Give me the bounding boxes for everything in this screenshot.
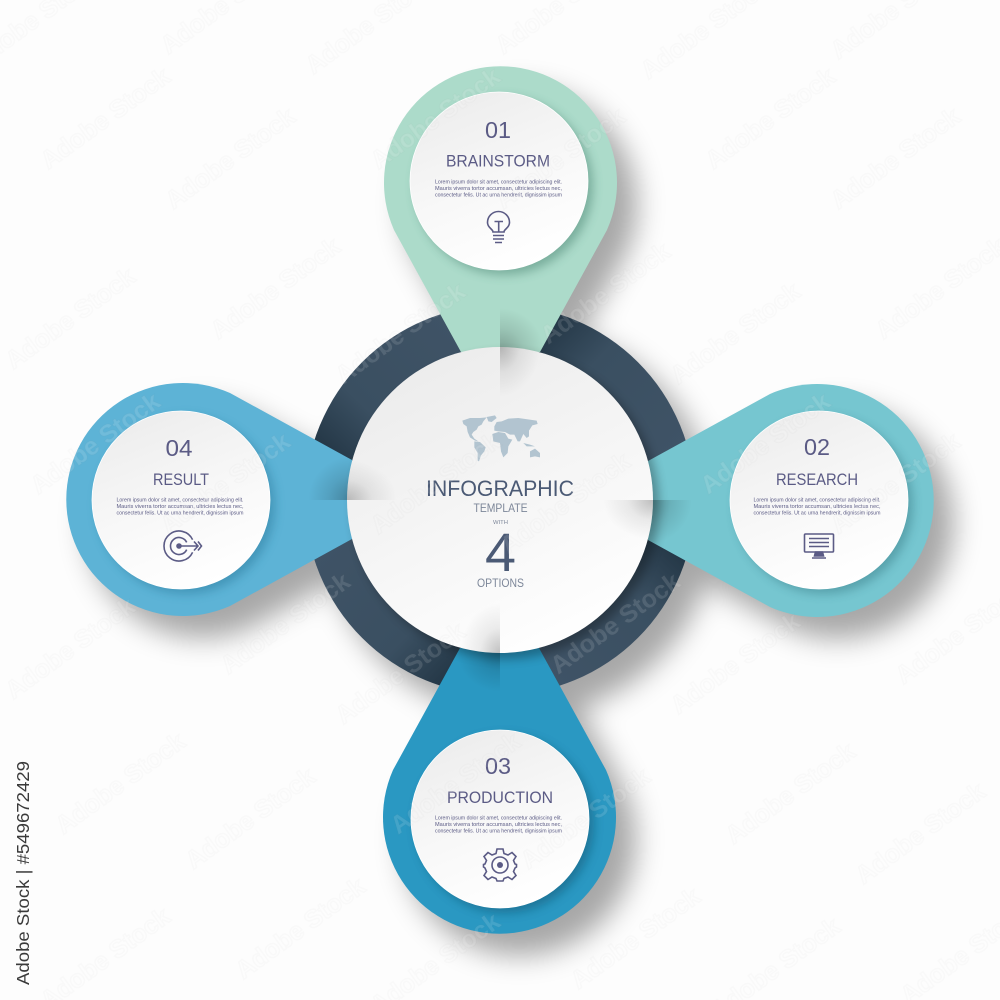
watermark: Adobe Stock: [0, 592, 140, 705]
center title: 4: [485, 523, 516, 583]
card 01 brainstorm: [410, 92, 593, 275]
card 01 brainstorm: Lorem ipsum dolor sit amet, consectetur adipiscing elit.: [435, 180, 562, 186]
watermark: Adobe Stock: [230, 872, 370, 985]
watermark: Adobe Stock: [385, 727, 525, 840]
watermark: Adobe Stock: [495, 447, 635, 560]
watermark: Adobe Stock: [365, 427, 505, 540]
watermark: Adobe Stock: [825, 102, 965, 215]
watermark: Adobe Stock: [205, 232, 345, 345]
card 03 production: [411, 730, 594, 913]
icon: light bulb: [488, 212, 510, 242]
center circle: [340, 340, 660, 660]
watermark: Adobe Stock: [700, 62, 840, 175]
card 04 result: Lorem ipsum dolor sit amet, consectetur adipiscing elit.: [116, 498, 244, 504]
watermark: Adobe Stock: [35, 62, 175, 175]
watermark: Adobe Stock: [330, 277, 470, 390]
watermark: Adobe Stock: [665, 607, 805, 720]
card 01 brainstorm: 01: [485, 117, 511, 143]
watermark: Adobe Stock: [160, 102, 300, 215]
card 03 production: Lorem ipsum dolor sit amet, consectetur adipiscing elit.: [435, 816, 562, 822]
card 04 result: Mauris viverra tortor accumsan, ultricies lectus nec,: [116, 504, 244, 510]
watermark: Adobe Stock: [155, 427, 295, 540]
card 01 brainstorm: consectetur felis. Ut ac urna hendrerit, dignissim ipsum: [435, 192, 562, 198]
pin 04 sky blue: [66, 383, 352, 616]
watermark: Adobe Stock: [50, 727, 190, 840]
card 01 brainstorm: Mauris viverra tortor accumsan, ultricies lectus nec,: [435, 186, 563, 192]
center title: INFOGRAPHIC: [426, 476, 574, 501]
card 02 research: 02: [804, 434, 830, 460]
pin 02 teal: [648, 384, 934, 617]
watermark: Adobe Stock: [515, 762, 655, 875]
watermark: Adobe Stock: [565, 882, 705, 995]
card 04 result: 04: [166, 435, 193, 461]
center title: [426, 476, 574, 590]
icon: monitor: [804, 534, 834, 558]
watermark: Adobe Stock: [180, 762, 320, 875]
card 02 research: Mauris viverra tortor accumsan, ultricies lectus nec,: [754, 504, 881, 510]
watermark: Adobe Stock: [535, 237, 675, 350]
icon: target: [164, 531, 202, 561]
card 03 production: consectetur felis. Ut ac urna hendrerit, dignissim ipsum: [435, 828, 562, 834]
watermark: Adobe Stock: [330, 617, 470, 730]
watermark: Adobe Stock: [665, 277, 805, 390]
watermark: Adobe Stock: [720, 737, 860, 850]
card 04 result: [92, 411, 275, 594]
card 01 brainstorm: BRAINSTORM: [446, 152, 550, 170]
center title: OPTIONS: [477, 578, 524, 590]
card 03 production: PRODUCTION: [447, 789, 553, 807]
pin 01 mint: [384, 66, 617, 352]
pin 03 blue: [383, 648, 616, 934]
watermark: Adobe Stock: [850, 777, 990, 890]
card 02 research: consectetur felis. Ut ac urna hendrerit, dignissim ipsum: [754, 510, 881, 516]
watermark: Adobe Stock: [365, 62, 505, 175]
watermark: Adobe Stock: [0, 262, 140, 375]
center title: WITH: [493, 520, 508, 526]
card 03 production: 03: [485, 753, 511, 779]
watermark: Adobe Stock: [490, 102, 630, 215]
card 02 research: [730, 411, 913, 594]
card 04 result: RESULT: [153, 471, 209, 489]
card 03 production: Mauris viverra tortor accumsan, ultricies lectus nec,: [435, 822, 563, 828]
watermark: Adobe Stock: [695, 387, 835, 500]
watermark: Adobe Stock: [25, 387, 165, 500]
card 04 result: consectetur felis. Ut ac urna hendrerit, dignissim ipsum: [116, 510, 244, 516]
watermark: Adobe Stock: [545, 567, 685, 680]
card 02 research: Lorem ipsum dolor sit amet, consectetur adipiscing elit.: [754, 498, 880, 504]
dark ring: [305, 305, 695, 695]
icon: gear: [484, 849, 516, 881]
watermark: Adobe Stock: [215, 567, 355, 680]
center title: TEMPLATE: [474, 503, 528, 515]
drop shadows: [86, 88, 954, 956]
world map: [462, 415, 540, 461]
stock id label: Adobe Stock | #549672429: [13, 761, 33, 985]
watermark: Adobe Stock: [825, 427, 965, 540]
card 02 research: RESEARCH: [776, 471, 858, 489]
